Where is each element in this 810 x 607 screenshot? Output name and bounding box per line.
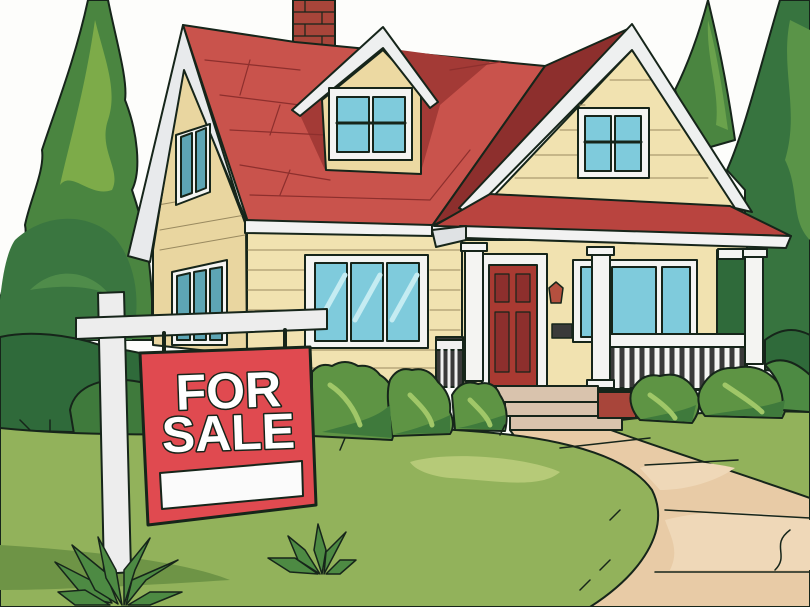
porch left rail [436, 337, 463, 388]
grass tuft: lawn [268, 524, 356, 574]
lawn: front [0, 428, 658, 607]
sign post [98, 292, 131, 574]
sign arm [76, 309, 327, 339]
grass tuft: by post [55, 537, 182, 605]
bushes: front [312, 360, 810, 440]
tree: right conifers [675, 0, 810, 345]
grass details [20, 420, 620, 590]
wall: porch [462, 240, 747, 390]
window: left gable [176, 124, 210, 205]
bush: right behind porch [765, 330, 810, 375]
walkway [510, 426, 810, 607]
sign board [140, 347, 316, 525]
window: left lower [172, 260, 227, 345]
sign text: FOR [175, 361, 282, 421]
sign text: SALE [161, 403, 296, 463]
house walls [153, 62, 747, 390]
bushes: behind left of house [0, 334, 175, 440]
window: dormer [329, 88, 412, 160]
chimney [293, 0, 335, 58]
door [482, 254, 547, 386]
walkway cracks [560, 438, 810, 572]
porch shadow [717, 250, 745, 335]
window: porch [573, 260, 697, 342]
dormer [292, 27, 438, 174]
fascia: left gable [128, 25, 248, 262]
fascia: right gable [459, 24, 752, 214]
hooks [164, 330, 285, 356]
porch roof [432, 194, 791, 248]
fascia: main eave [245, 220, 432, 236]
porch columns [461, 243, 767, 388]
right gable [459, 24, 752, 215]
lawn: right [540, 411, 810, 530]
sign text [161, 361, 296, 463]
window: right gable [578, 108, 649, 178]
blank panel [160, 461, 303, 509]
main roof [183, 25, 630, 226]
porch steps [496, 386, 636, 430]
lantern and plaque [549, 282, 572, 338]
wall: front [247, 232, 462, 382]
porch railing [608, 334, 750, 388]
window: front [305, 255, 428, 348]
tree: left conifer [0, 0, 152, 340]
wall: left gable [153, 62, 247, 355]
for sale sign [76, 292, 327, 574]
